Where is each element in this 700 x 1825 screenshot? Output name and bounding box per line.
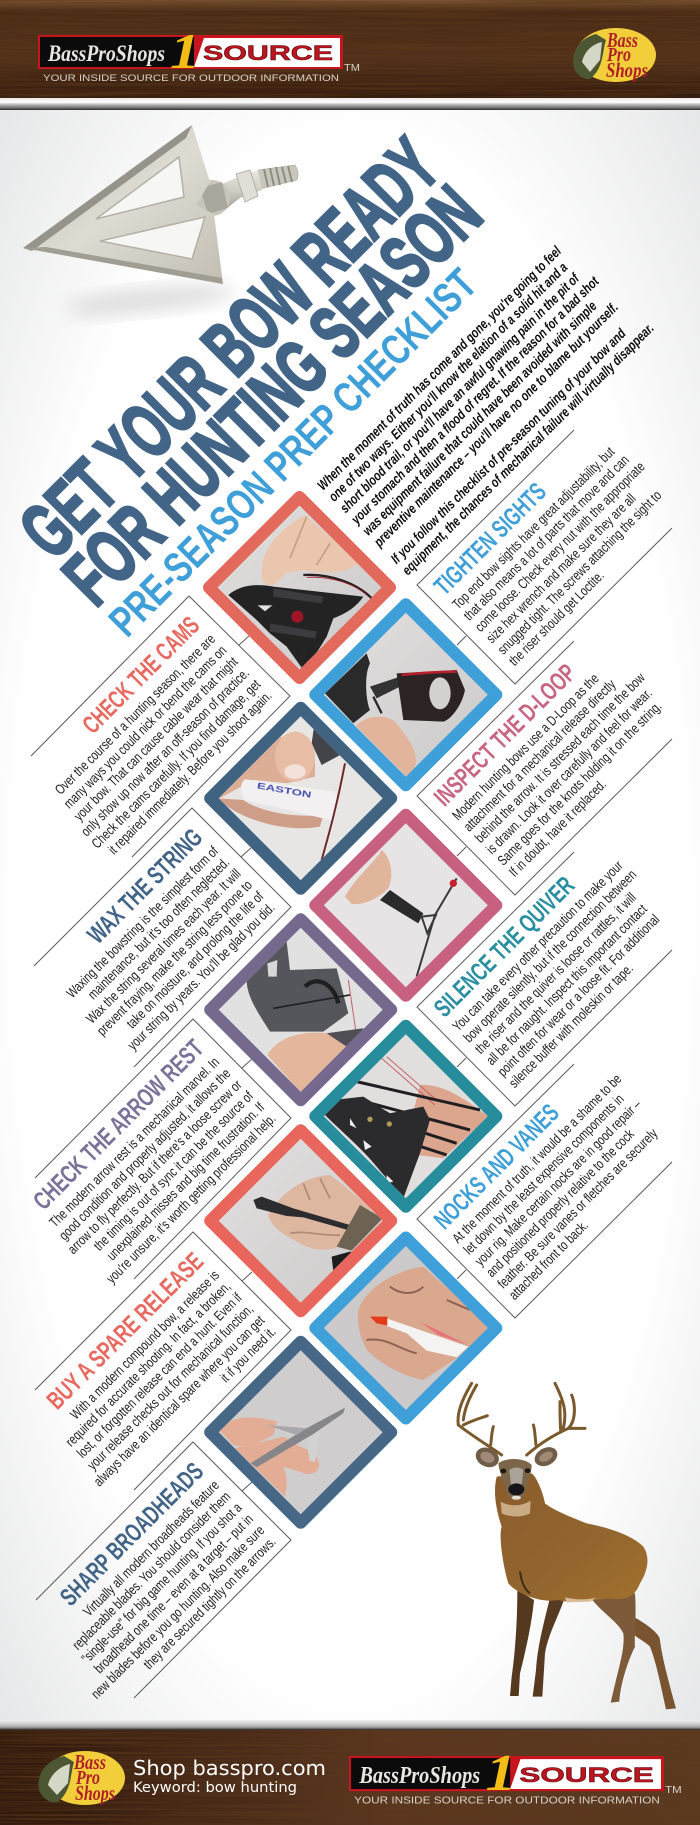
footer badge: Bass Pro Shops oval: Pro [75, 1767, 100, 1789]
panel: sharp broadheads: they are secured tightly on the arrows. [140, 1534, 279, 1672]
header logo: Bass Pro Shops 1Source: YOUR INSIDE SOURCE FOR OUTDOOR INFORMATION [43, 73, 339, 84]
panel: tighten sights: Top end bow sights have great adjustability, but [449, 444, 618, 612]
footer call to action [133, 1756, 326, 1796]
panel: inspect the d-loop: attachment for a mechanical release directly [461, 676, 619, 835]
panel: check the cams: CHECK THE CAMS [77, 611, 205, 739]
panel: nocks and vanes: and positioned properly relative to the cock [483, 1126, 638, 1280]
panel: check the cams: it repaired immediately. Before you shoot again. [105, 688, 275, 858]
panel: sharp broadheads: new blades before you go hunting. Also make sure [88, 1522, 268, 1702]
panel: check the arrow rest: unexplained misses and big time frustration. If [104, 1099, 268, 1264]
panel: buy a spare release: your release checks out for mechanical function, [84, 1301, 256, 1473]
header badge: Bass Pro Shops oval: Bass [606, 28, 638, 52]
footer call to action: Keyword: bow hunting [133, 1780, 297, 1796]
panel: silence the quiver: silence buffer with moleskin or tape. [506, 960, 636, 1091]
footer badge: Bass Pro Shops oval: Bass [73, 1750, 106, 1774]
footer logo: Bass Pro Shops 1Source: BassProShops [358, 1763, 480, 1789]
panel: tighten sights: the riser should get Loctite. [506, 568, 607, 669]
panel: silence the quiver [429, 855, 685, 1091]
intro text [314, 235, 657, 579]
footer call to action: Shop basspro.com [133, 1756, 326, 1780]
intro text: equipment, the chances of mechanical failure will virtually disappear. [399, 320, 657, 578]
header badge: Bass Pro Shops oval: Pro [606, 44, 631, 66]
footer badge: Bass Pro Shops oval: Shops [75, 1781, 115, 1805]
photo diamond: arrow rest [204, 913, 398, 1106]
panel: buy a spare release: BUY A SPARE RELEASE [42, 1247, 209, 1415]
panel: nocks and vanes: your rig. Make certain nocks are in good repair – [472, 1097, 644, 1269]
panel: sharp broadheads [43, 1457, 279, 1713]
panel: tighten sights [429, 436, 682, 669]
panel: inspect the d-loop: behind the arrow. It is stressed each time the bow [472, 670, 648, 846]
panel: sharp broadheads: broadhead one time – even at a target – put in [91, 1511, 256, 1677]
panel: check the arrow rest: you're unsure, it's worth getting professional help. [103, 1111, 279, 1287]
panel: check the arrow rest: arrow to fly perfectly. But if there's a loose screw or [65, 1077, 245, 1257]
panel: tighten sights: come loose. Check every nut with the appropriate [472, 459, 648, 635]
panel: buy a spare release: always have an identical spare where you can get [91, 1312, 268, 1490]
panel: wax the string: WAX THE STRING [82, 823, 208, 949]
panel: silence the quiver: the riser and the quiver is loose or rattles, it will [472, 890, 639, 1057]
header logo: Bass Pro Shops 1Source [38, 23, 360, 84]
panel: check the cams: Over the course of a hunting season, there are [52, 631, 218, 798]
panel: silence the quiver: bow operate silently, but if the connection between [461, 867, 640, 1046]
panel: check the cams: only show up now after an off-season of practice. [78, 665, 252, 840]
panel: wax the string: maintenance, but it's too often neglected. [85, 855, 233, 1003]
deer illustration [458, 1383, 676, 1709]
panel: buy a spare release: lost, or forgotten release can end a hunt. Even if [74, 1290, 245, 1461]
frame lines around text panels [31, 430, 672, 1698]
footer badge: Bass Pro Shops oval [39, 1750, 125, 1805]
panel: nocks and vanes: At the moment of truth, it would be a shame to be [449, 1071, 625, 1246]
intro text: short blood trail, or you'll have an awful gnawing pain in the pit of [337, 269, 584, 516]
panel: sharp broadheads: Virtually all modern broadheads feature [80, 1477, 222, 1619]
intro text: If you follow this checklist of pre-season tuning of your bow and [388, 325, 629, 567]
panel: inspect the d-loop: Same goes for the knots holding it on the string. [494, 698, 665, 869]
panel: wax the string: Waxing the bowstring is the simplest form of [63, 843, 222, 1001]
intro text: preventive maintenance – you'll have no one to blame but yourself. [370, 299, 621, 551]
panel: buy a spare release: it if you need it. [217, 1324, 279, 1386]
photo diamond: release [204, 1124, 398, 1318]
footer logo: Bass Pro Shops 1Source [349, 1745, 682, 1807]
intro text: your stomach and then a flood of regret. If the reason for a bad shot [348, 273, 602, 528]
intro text: one of two ways. Either you'll know the elation of a solid hit and a [326, 260, 571, 505]
title: PRE-SEASON PREP CHECKLIST [100, 260, 486, 646]
panel: check the arrow rest: good condition and properly adjusted, it allows the [56, 1066, 234, 1243]
panel: nocks and vanes: let down by the least expensive components in [461, 1091, 627, 1258]
panel: check the cams: your bow. That can cause cable wear that might [71, 654, 241, 824]
panel: inspect the d-loop: If in doubt, have it replaced. [506, 776, 609, 880]
panel: nocks and vanes: NOCKS AND VANES [429, 1099, 565, 1235]
title [1, 122, 526, 647]
panel: check the cams [43, 611, 275, 863]
panel: sharp broadheads: replaceable blades. You should consider them [69, 1489, 234, 1653]
panel: check the arrow rest: the timing is out of sync it can be the source of [91, 1088, 257, 1254]
footer logo: Bass Pro Shops 1Source: SOURCE [519, 1762, 654, 1787]
panel: inspect the d-loop: Modern hunting bows use a D-Loop as the [449, 671, 602, 823]
panel: check the arrow rest: CHECK THE ARROW REST [28, 1034, 209, 1215]
footer logo: Bass Pro Shops 1Source: YOUR INSIDE SOURCE FOR OUTDOOR INFORMATION [354, 1796, 660, 1807]
panel: buy a spare release [42, 1247, 279, 1501]
header logo: Bass Pro Shops 1Source: SOURCE [203, 42, 333, 65]
photo diamond: wax [204, 702, 398, 895]
panel: wax the string: take on moisture, and prolong the life of [123, 888, 267, 1032]
photo diamond: quiver [307, 1017, 510, 1220]
panel: sharp broadheads: "single-use" for big game hunting. If you shot a [79, 1500, 245, 1666]
icon: broadhead arrow tip [23, 125, 298, 321]
panel: tighten sights: size hex wrench and make sure they are all [483, 491, 639, 646]
panel: check the cams: Check the cams carefully. If you find damage, get [88, 676, 264, 852]
panel: inspect the d-loop: is drawn. Look it over carefully and feel for wear. [483, 685, 655, 857]
intro text: was equipment failure that could have been avoided with simple [359, 298, 600, 539]
panel: inspect the d-loop [429, 647, 682, 880]
panel: wax the string: Wax the string several times each year. It will [83, 866, 244, 1027]
header badge: Bass Pro Shops oval [573, 28, 656, 82]
header logo: Bass Pro Shops 1Source: 1 [170, 23, 200, 79]
panel: silence the quiver: You can take every other precaution to make your [449, 858, 626, 1034]
photo diamond: d-loop [307, 806, 510, 1010]
panel: nocks and vanes [429, 1071, 681, 1303]
panel: buy a spare release: required for accurate shooting. In fact, a broken, [63, 1279, 234, 1450]
panel: nocks and vanes: feather. Be sure vanes or fletches are securely [494, 1125, 661, 1292]
header band [0, 0, 700, 110]
footer band [0, 1720, 700, 1825]
footer logo: Bass Pro Shops 1Source: TM [665, 1785, 682, 1796]
panel: inspect the d-loop: INSPECT THE D-LOOP [429, 659, 582, 812]
header badge: Bass Pro Shops oval: Shops [606, 58, 648, 82]
panel: silence the quiver: point often for wear or a loose fit. For additional [494, 911, 663, 1080]
photo diamond: sight [307, 596, 510, 800]
header logo: Bass Pro Shops 1Source: BassProShops [47, 41, 165, 66]
header logo: Bass Pro Shops 1Source: TM [344, 63, 360, 74]
panel: silence the quiver: SILENCE THE QUIVER [429, 871, 580, 1023]
panel: buy a spare release: With a modern compound bow, a release is [67, 1267, 222, 1423]
photo diamond: cams [200, 489, 400, 690]
panel: sharp broadheads: SHARP BROADHEADS [55, 1457, 209, 1612]
panel: wax the string: your string by years. You'll be glad you did. [125, 900, 278, 1053]
photo diamond: nocks [309, 1232, 502, 1424]
photo diamond: wax: EASTON [256, 780, 312, 800]
panel: check the arrow rest: The modern arrow rest is a mechanical marvel. In [46, 1054, 222, 1230]
panel: silence the quiver: all be for naught. Inspect this important contact [483, 901, 651, 1068]
footer logo: Bass Pro Shops 1Source: 1 [485, 1745, 516, 1802]
photo diamond: broadhead [204, 1336, 398, 1529]
panel: check the arrow rest [28, 1034, 279, 1291]
panel: tighten sights: TIGHTEN SIGHTS [429, 478, 552, 601]
panel: wax the string [60, 823, 278, 1061]
panel: tighten sights: that also means a lot of parts that move and can [461, 452, 632, 624]
panel: check the cams: many ways you could nick or bend the cams on [61, 643, 230, 812]
intro text: When the moment of truth has come and gone, you're going to feel [314, 243, 565, 493]
panel: nocks and vanes: attached front to back. [506, 1217, 591, 1303]
panel: wax the string: prevent fraying, make the string less prone to [94, 877, 255, 1039]
panel: tighten sights: snugged tight. The screws attaching the sight to [494, 487, 665, 658]
